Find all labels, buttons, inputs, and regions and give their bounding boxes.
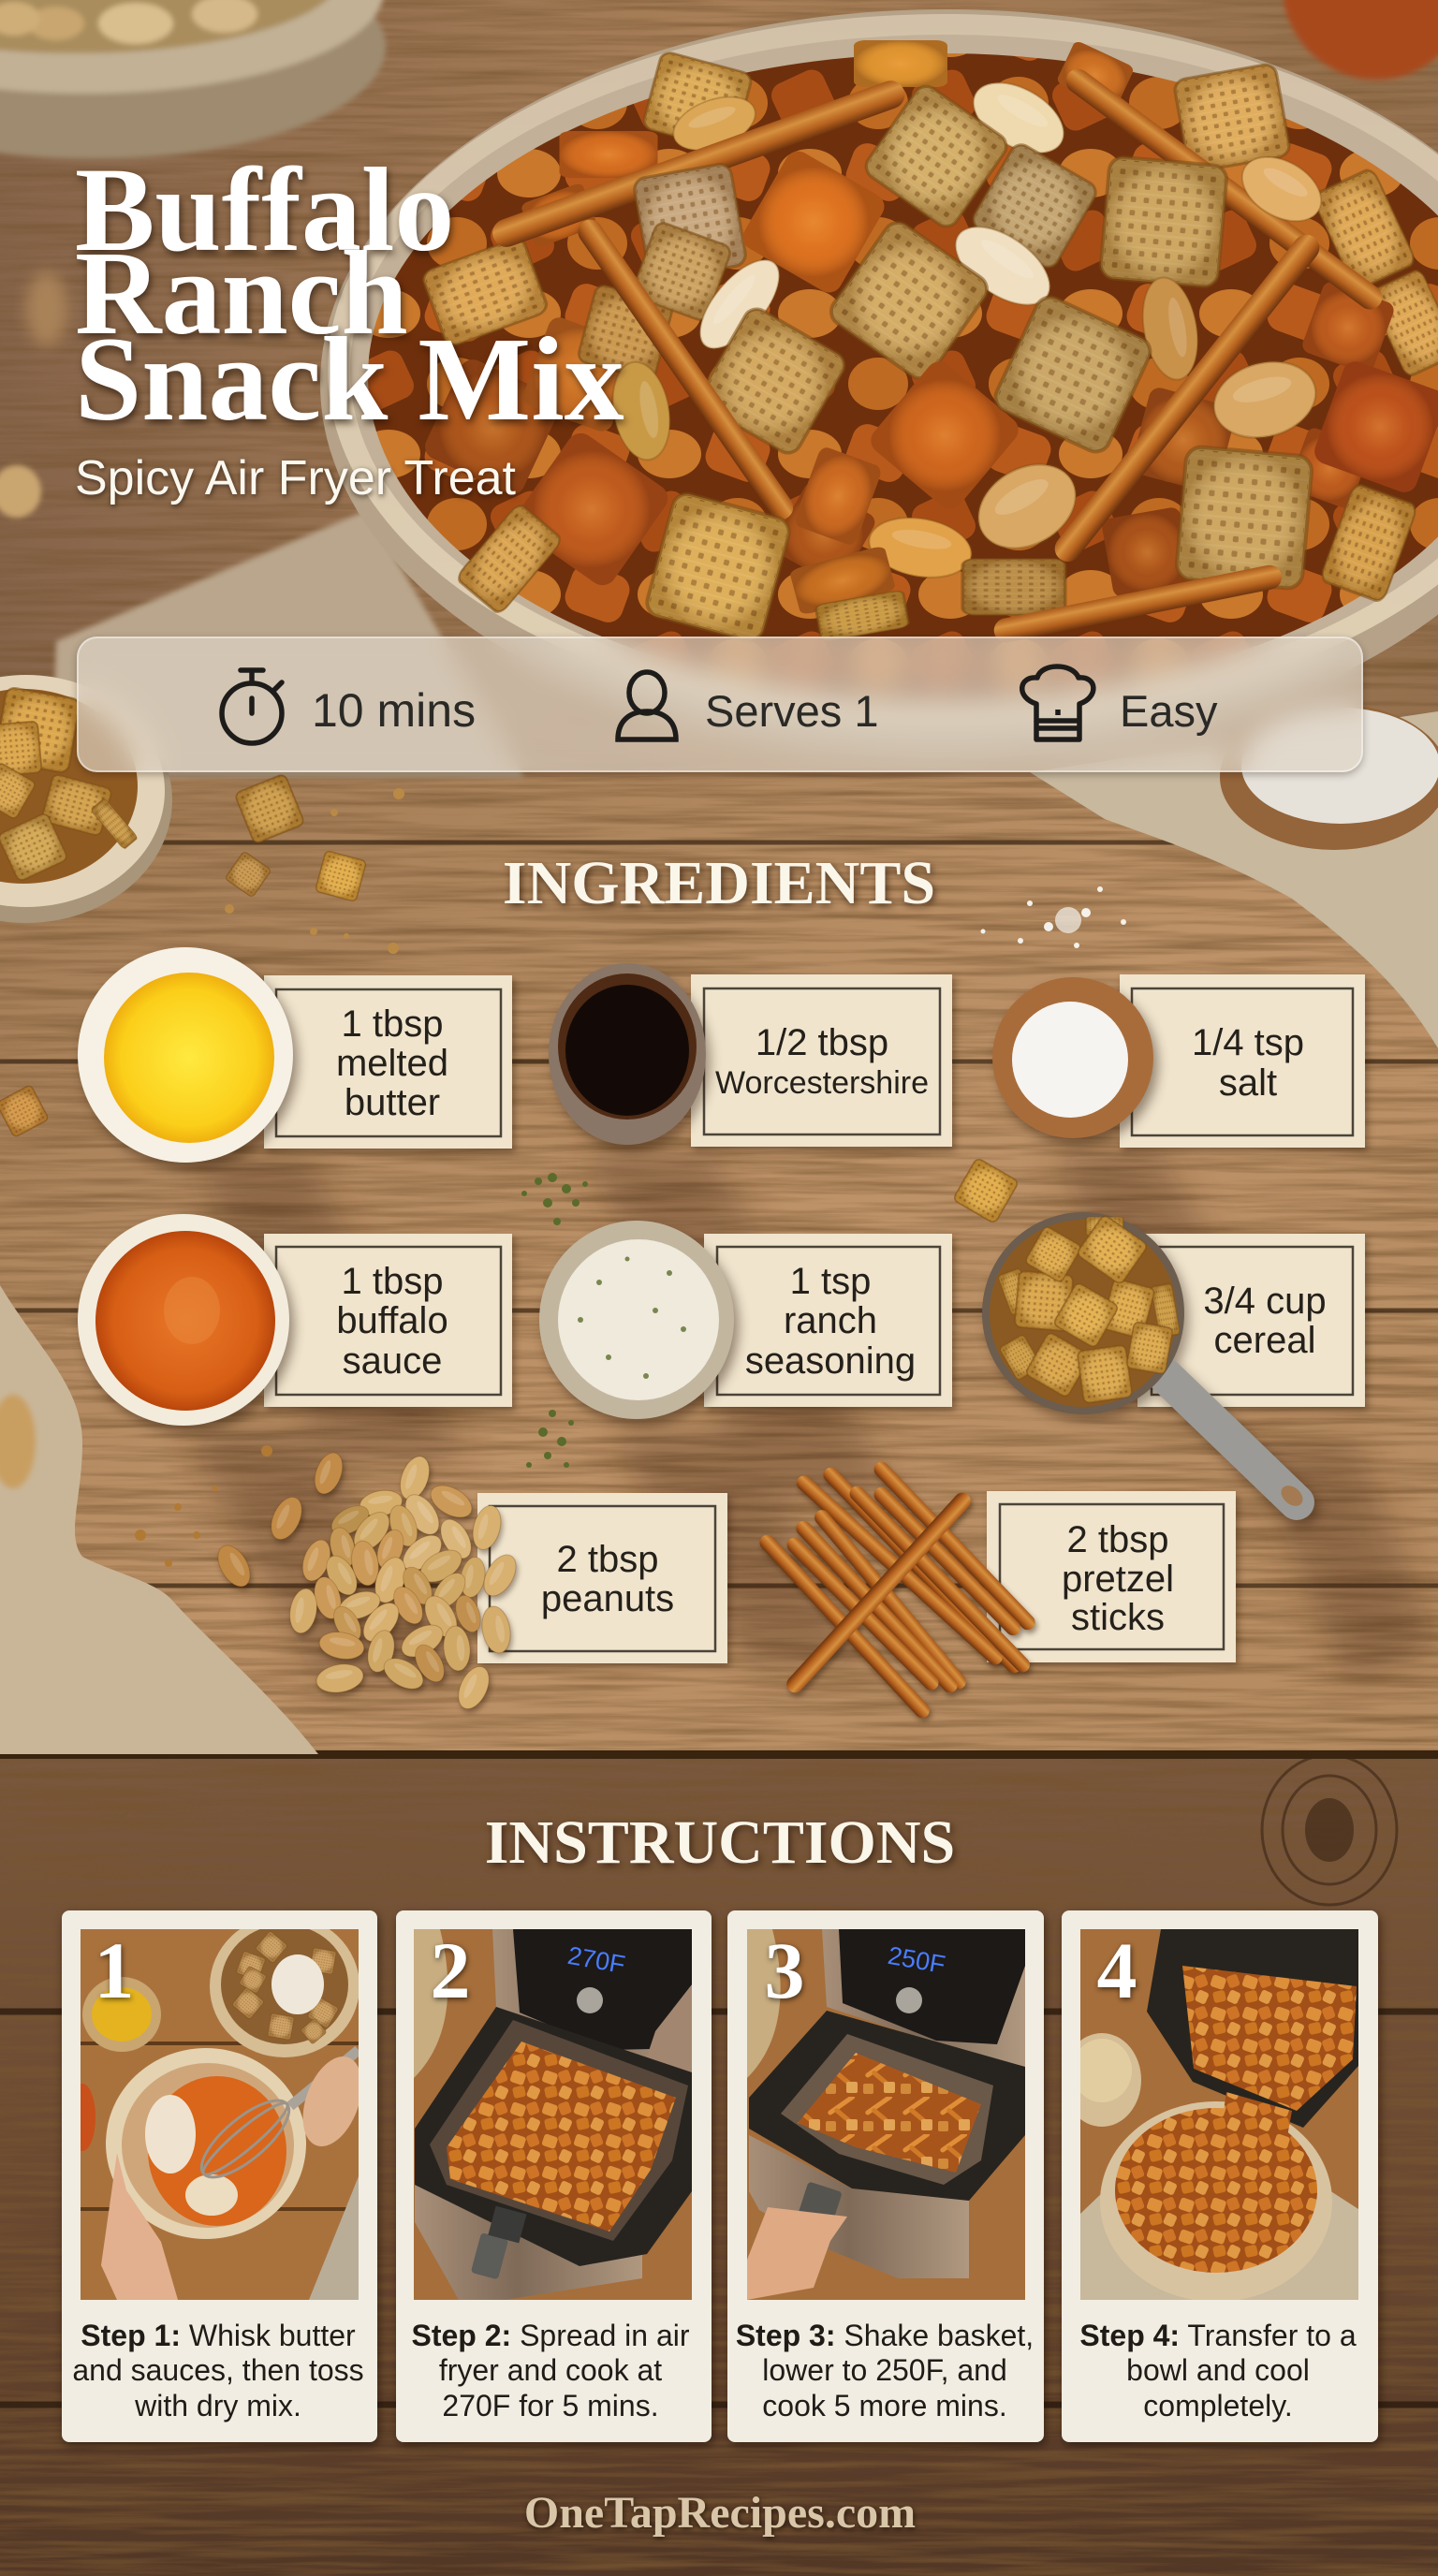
step 4 text	[1079, 2319, 1357, 2422]
icon: butter bowl	[78, 947, 293, 1163]
bowl food items back layer	[420, 40, 1438, 598]
icon: stopwatch	[222, 670, 282, 743]
step 3 text: lower to 250F, and	[762, 2353, 1007, 2387]
subtitle: Spicy Air Fryer Treat	[75, 451, 517, 505]
ingredient card: worcestershire: Worcestershire	[715, 1065, 929, 1101]
info bar	[77, 637, 1363, 772]
crumbs	[0, 465, 41, 518]
step 2 text: Step 2: Spread in air	[411, 2319, 690, 2352]
ingredient card: melted butter	[264, 975, 512, 1149]
ingredient card: worcestershire	[691, 974, 952, 1147]
title: Snack Mix	[75, 313, 624, 446]
herb sprinkle lower	[526, 1410, 574, 1468]
title	[75, 143, 624, 446]
prep time: 10 mins	[312, 684, 476, 737]
hero scene	[0, 0, 1438, 777]
step 1 text: Step 1: Whisk butter	[81, 2319, 356, 2352]
step number 4: 4	[1097, 1925, 1137, 2015]
icon: ranch bowl	[539, 1221, 734, 1419]
icon: pretzel sticks	[756, 1458, 1038, 1721]
icon: buffalo sauce bowl	[78, 1214, 289, 1426]
ingredient card: ranch seasoning	[704, 1234, 952, 1407]
linen napkin under bowl	[54, 510, 524, 777]
ingredient card: ranch seasoning: seasoning	[745, 1340, 916, 1382]
ingredient card: cereal: 3/4 cup	[1203, 1281, 1327, 1322]
step 4 text: bowl and cool	[1126, 2353, 1310, 2387]
salt sprinkle	[981, 886, 1126, 948]
footer brand: OneTapRecipes.com	[524, 2488, 916, 2538]
icon: measuring cup with cereal	[982, 1212, 1307, 1510]
step card 1	[62, 1910, 377, 2442]
wood background: hero section	[0, 0, 1438, 777]
icon: worcestershire glass	[549, 963, 706, 1145]
ingredient card: melted butter: melted	[336, 1043, 448, 1084]
top-left peanut bowl	[0, 0, 386, 159]
step number 3: 3	[764, 1925, 805, 2015]
servings: Serves 1	[705, 686, 878, 736]
wood background: instructions section	[0, 1754, 1438, 2576]
ingredients heading: INGREDIENTS	[503, 849, 935, 917]
side bowl of cereal	[0, 675, 172, 923]
wood background: ingredients section	[0, 777, 1438, 1754]
ingredient card: ranch seasoning: 1 tsp	[790, 1261, 871, 1302]
step 4 text: completely.	[1143, 2389, 1293, 2422]
sauce jar top-right	[1283, 0, 1438, 80]
diagonal light shadows on ingredients table	[187, 1151, 1438, 1685]
ingredient card: pretzel sticks: sticks	[1071, 1597, 1165, 1638]
bowl food items front layer	[456, 81, 1438, 645]
step 2 illustration: air fryer at 270F: 270F	[565, 1941, 627, 1979]
step 3 illustration: shaking basket at 250F: 250F	[886, 1941, 947, 1979]
ingredient card: worcestershire: 1/2 tbsp	[756, 1022, 888, 1063]
step 1 text: and sauces, then toss	[72, 2353, 364, 2387]
step card 2	[396, 1910, 712, 2442]
ingredient card: buffalo sauce: buffalo	[336, 1300, 448, 1341]
title: Ranch	[75, 227, 408, 359]
step card 4	[1062, 1910, 1378, 2442]
loose cereal and crumbs	[0, 773, 1020, 1224]
icon: person	[618, 672, 676, 739]
ingredient card: melted butter: 1 tbsp	[342, 1003, 443, 1045]
step 2 text: fryer and cook at	[439, 2353, 662, 2387]
icon: salt bowl	[992, 977, 1153, 1138]
salt dish top right	[1220, 704, 1438, 850]
step 3 illustration: shaking basket at 250F	[747, 1929, 1025, 2300]
ingredient card: buffalo sauce	[264, 1234, 512, 1407]
step 1 text	[72, 2319, 364, 2422]
step card 3	[727, 1910, 1044, 2442]
step 1 text: with dry mix.	[134, 2389, 301, 2422]
title: Buffalo	[75, 143, 454, 276]
step 2 text	[411, 2319, 690, 2422]
crumbs near peanuts	[135, 1445, 272, 1567]
ingredient card: pretzel sticks	[987, 1491, 1236, 1662]
ingredient card: peanuts: peanuts	[541, 1578, 674, 1619]
step number 1: 1	[94, 1925, 135, 2015]
step 3 text: Step 3: Shake basket,	[736, 2319, 1034, 2352]
ingredient card: peanuts: 2 tbsp	[557, 1539, 658, 1580]
main bowl	[320, 9, 1438, 758]
linen napkin bottom-left	[0, 1285, 318, 1754]
step 2 text: 270F for 5 mins.	[442, 2389, 659, 2422]
step 3 text	[736, 2319, 1034, 2422]
ingredient card: salt: salt	[1219, 1062, 1277, 1104]
ingredient card: salt	[1120, 974, 1365, 1148]
step 1 illustration: whisking sauce	[81, 1929, 359, 2300]
ingredient card: salt: 1/4 tsp	[1192, 1022, 1304, 1063]
ingredient card: buffalo sauce: 1 tbsp	[342, 1261, 443, 1302]
step 2 illustration: air fryer at 270F	[414, 1929, 692, 2300]
ingredient card: ranch seasoning: ranch	[784, 1300, 877, 1341]
step number 2: 2	[431, 1925, 470, 2015]
difficulty: Easy	[1120, 686, 1218, 736]
ingredient card: cereal: cereal	[1214, 1320, 1315, 1361]
crumbs on napkin	[0, 1395, 36, 1488]
ingredient card: melted butter: butter	[345, 1082, 440, 1123]
step 4 illustration: pouring into bowl	[1080, 1929, 1358, 2300]
icon: chef hat	[1022, 666, 1093, 739]
ingredient card: pretzel sticks: 2 tbsp	[1067, 1519, 1168, 1560]
ingredient card: buffalo sauce: sauce	[343, 1340, 442, 1382]
herb sprinkle upper	[521, 1173, 588, 1225]
ingredient card: cereal	[1137, 1234, 1365, 1407]
step 4 text: Step 4: Transfer to a	[1079, 2319, 1357, 2352]
ingredient card: pretzel sticks: pretzel	[1062, 1559, 1174, 1600]
instructions heading: INSTRUCTIONS	[485, 1808, 955, 1877]
step 3 text: cook 5 more mins.	[762, 2389, 1007, 2422]
icon: peanut pile	[212, 1449, 522, 1714]
linen napkin right	[1030, 711, 1438, 1048]
ingredient card: peanuts	[477, 1493, 727, 1663]
